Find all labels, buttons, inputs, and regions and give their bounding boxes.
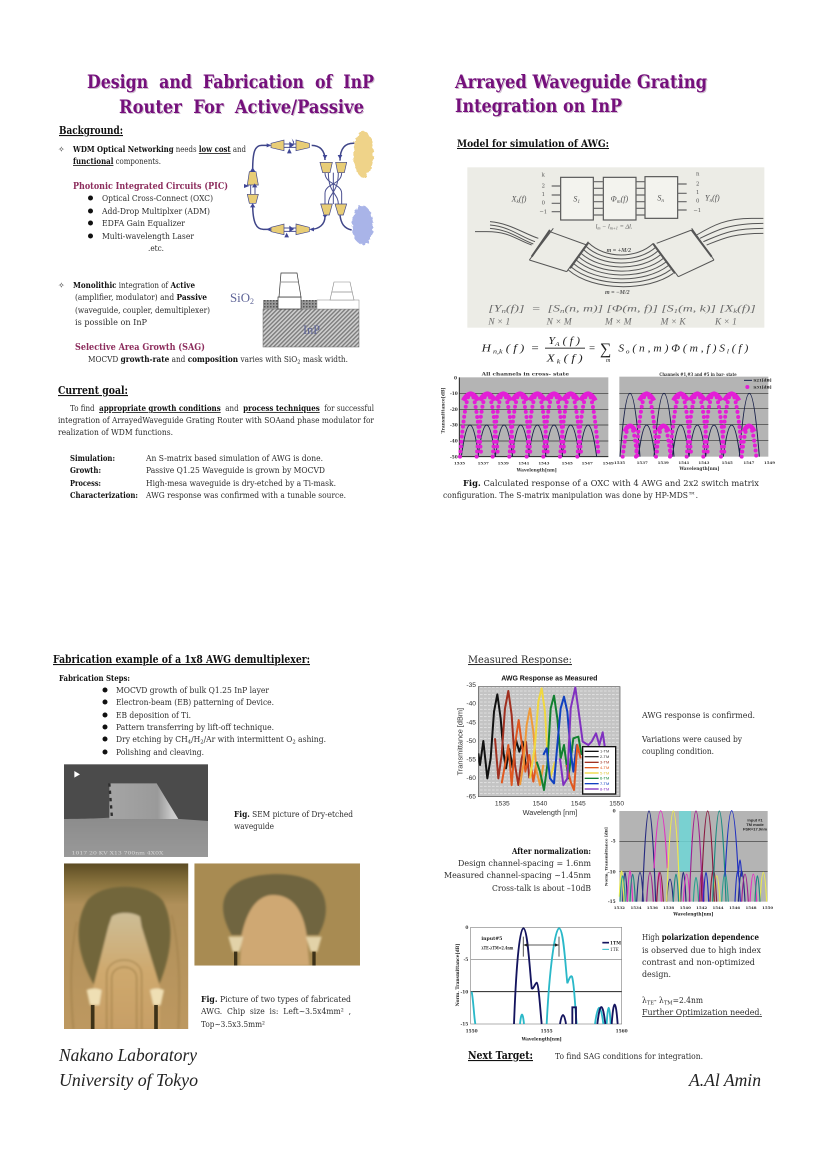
title left (87, 72, 374, 118)
cloud: blue network (352, 206, 373, 244)
diagram: AWG schematic scan: n (661, 198, 664, 204)
diagram: AWG schematic scan: Φ (611, 195, 617, 204)
text block: polarization dependence: TE (647, 1000, 654, 1006)
chart: normalized transmittance: -10 (608, 870, 616, 875)
chart: polarization dependence: -15 (461, 1023, 468, 1028)
panel: measured response (444, 654, 773, 1090)
chart: all channels in cross state: 1549 (603, 460, 614, 465)
chart: AWG response as measured: -35 (466, 682, 476, 689)
chart: normalized transmittance: 1534 (630, 905, 642, 910)
title left: Router For Active/Passive (119, 97, 364, 118)
equation: transfer function: A (554, 341, 561, 348)
chart: channels in bar state: 1549 (764, 460, 775, 465)
text block: MOCVD growth: MOCVD growth-rate and composition varies with SiO (88, 354, 303, 364)
equation: transfer function (480, 336, 749, 366)
text block: polarization dependence: TM (664, 1000, 673, 1006)
equation: transfer function: m (606, 358, 611, 364)
diagram: AWG schematic scan: 2 (542, 183, 545, 189)
text block: MOCVD growth: 2 (297, 360, 300, 366)
table: work summary (70, 453, 346, 500)
figure caption: SEM picture (234, 809, 353, 831)
chart: polarization dependence: Wavelength[nm] (521, 1037, 562, 1042)
table: work summary: An S-matrix based simulation of AWG is done. (145, 454, 323, 463)
bullet list: fabrication steps: 4 (188, 740, 192, 746)
figure caption: calculated response: Fig. Calculated response of a OXC with 4 AWG and 2x2 switch matrix (463, 478, 760, 488)
chart: channels in bar state: 1535 (614, 460, 625, 465)
label: InP: InP (303, 322, 320, 337)
chart: all channels in cross state: 1547 (582, 460, 593, 465)
chart: channels in bar state: 1545 (722, 460, 733, 465)
text block: monolithic integration: ✧ (58, 281, 65, 290)
title left: Design and Fabrication of InP (87, 72, 374, 93)
equation: transfer function: Y (548, 336, 554, 347)
bullet list: fabrication steps: Polishing and cleaving. (116, 748, 204, 757)
equation: transfer function: ( f ) = (503, 344, 539, 355)
chart: AWG response as measured: 1535 (495, 801, 510, 808)
chart: polarization dependence: 1555 (541, 1029, 553, 1034)
table: work summary: Process: (70, 478, 101, 488)
diagram: AWG schematic scan: K × 1 (714, 318, 737, 328)
diagram: AWG schematic scan: S (657, 194, 661, 203)
bullet list: fabrication steps: EB deposition of Ti. (116, 711, 191, 720)
legend: 2-TM (600, 754, 609, 759)
affiliation: University of Tokyo (59, 1070, 198, 1090)
text block: WDM networking: functional components. (73, 156, 161, 166)
heading: next target: Next Target: (468, 1049, 533, 1062)
text block: AWG response confirmed: coupling condition. (642, 747, 714, 756)
chart: AWG response as measured: 1545 (571, 801, 586, 808)
bullet list: fabrication steps (102, 686, 326, 757)
diagram: AWG schematic scan: X (512, 195, 517, 204)
diagram: AWG schematic scan: −1 (693, 208, 701, 214)
chart: normalized transmittance: FSR=17.9nm (743, 827, 767, 832)
table: work summary: Passive Q1.25 Waveguide is grown by MOCVD (146, 466, 325, 475)
chart: normalized transmittance: TM mode (746, 822, 765, 827)
bullet list: PIC types (88, 194, 213, 253)
diagram: AWG schematic scan: M × M (604, 318, 633, 328)
chart: all channels in cross state: 1537 (478, 460, 489, 465)
bullet list: fabrication steps: 2 (200, 740, 204, 746)
chart: all channels in cross state: 1541 (518, 460, 530, 465)
diagram: AWG schematic scan: l (596, 223, 597, 230)
chart: AWG response as measured: -65 (466, 794, 476, 801)
table: work summary: High-mesa waveguide is dry-etched by a Ti-mask. (146, 479, 336, 488)
equation: transfer function: ( n , m ) Φ ( m , f ) S (629, 344, 726, 355)
chart: channels in bar state: 1539 (658, 460, 669, 465)
chart: all channels in cross state: 1545 (562, 460, 573, 465)
diagram: AWG schematic scan: N × 1 (487, 318, 510, 328)
diagram: AWG schematic scan: 0 (542, 201, 546, 207)
diagram: AWG schematic scan: M × K (660, 318, 686, 328)
text block: WDM networking: WDM Optical Networking needs low cost and (72, 144, 246, 154)
bullet list: PIC types: .etc. (148, 244, 164, 253)
chart: normalized transmittance: 1540 (680, 905, 691, 910)
legend: 7-TM (600, 781, 609, 786)
chart: polarization dependence: 1550 (466, 1029, 478, 1034)
chart: AWG response as measured: 1540 (533, 801, 548, 808)
chart: AWG response as measured: -60 (466, 775, 476, 782)
chart: AWG response as measured: -55 (466, 757, 476, 764)
chart: AWG response as measured: -50 (466, 738, 476, 745)
text block: AWG response confirmed: AWG response is confirmed. (641, 711, 755, 720)
photo: fabricated AWG left (64, 863, 188, 1029)
figure caption: fabricated AWG: AWG. Chip size is: Left~3.5x4mm² , (200, 1007, 351, 1016)
poster canvas (53, 74, 775, 1090)
chart: all channels in cross state: -30 (450, 424, 458, 429)
label: SiO2: 2 (250, 297, 254, 306)
chart: normalized transmittance: 1544 (712, 905, 724, 910)
chart: AWG response as measured (456, 676, 624, 817)
diagram: AWG schematic scan: [Y (488, 305, 497, 315)
legend (583, 747, 616, 794)
equation: transfer function: ( f ) (729, 344, 749, 355)
chart: all channels in cross state: 1539 (498, 460, 509, 465)
chart: polarization dependence: 1TE (610, 948, 619, 953)
equation: transfer function: = (588, 344, 596, 355)
panel: background and motivation (58, 72, 374, 366)
text block: monolithic integration: (waveguide, coupler, demultiplexer) (75, 306, 210, 315)
heading: fabrication steps: Fabrication Steps: (59, 673, 130, 683)
text block: polarization dependence: design. (642, 970, 671, 979)
diagram: AWG schematic scan: k (733, 309, 738, 315)
diagram: AWG schematic scan: (f) (712, 194, 720, 203)
equation: transfer function: X (547, 354, 553, 365)
diagram: AWG schematic scan: m (597, 225, 601, 230)
text block: after normalization: Measured channel-spacing ~1.45nm (444, 871, 591, 880)
chart: normalized transmittance: -5 (611, 840, 616, 845)
chart: AWG response as measured: 1550 (609, 801, 624, 808)
equation: transfer function: ∑ (600, 341, 611, 358)
chart: normalized transmittance: 1536 (647, 905, 658, 910)
equation: transfer function: ( f ) (560, 336, 580, 347)
photo: SEM of dry-etched waveguide (64, 764, 208, 857)
chart: normalized transmittance: Norm. Transmittance [dB] (604, 827, 609, 886)
chart: normalized transmittance: 0 (613, 809, 616, 814)
diagram: AWG schematic scan: m (617, 199, 621, 205)
equation: transfer function: H (482, 344, 489, 355)
chart: channels in bar state: S31[dB] (753, 384, 772, 389)
table: work summary: Growth: (70, 465, 101, 475)
chart: channels in bar state: S21[dB] (753, 378, 772, 383)
text block: monolithic integration: (amplifier, modulator) and Passive (75, 292, 207, 302)
text block: polarization dependence (642, 932, 762, 1017)
chart: all channels in cross state: Transmittance[dB] (442, 387, 447, 433)
legend: 6-TM (600, 776, 609, 781)
figure caption: calculated response: configuration. The S-matrix manipulation was done by HP-MDS™. (443, 491, 698, 500)
diagram: AWG schematic scan: n (696, 171, 700, 177)
chart: polarization dependence: -5 (464, 958, 468, 963)
chart: polarization dependence: input#5 (481, 936, 502, 942)
text block: after normalization: Design channel-spacing = 1.6nm (458, 859, 591, 868)
text block: polarization dependence: contrast and non-optimized (642, 958, 755, 967)
figure caption: fabricated AWG: Fig. Picture of two types of fabricated (201, 994, 351, 1004)
panel: AWG simulation model (442, 72, 775, 500)
diagram: AWG schematic scan: n (709, 198, 712, 204)
text block: after normalization (444, 846, 591, 893)
chart: channels in bar state: Wavelength[nm] (678, 467, 719, 472)
chart: channels in bar state: 1541 (678, 460, 690, 465)
chart: channels in bar state (614, 372, 775, 472)
chart: AWG response as measured: -40 (466, 701, 476, 708)
text block: goal description: integration of ArrayedWaveguide Grating Router with SOAand phase modulator for (58, 416, 374, 425)
text block: MOCVD growth: mask width. (300, 355, 348, 364)
chart: normalized transmittance: 1538 (663, 905, 674, 910)
chart: normalized transmittance: 1542 (696, 905, 707, 910)
text block: after normalization: After normalization: (511, 846, 591, 856)
photo: SEM of dry-etched waveguide: 1017 20 KV X13 700nm 4X0X (72, 850, 164, 856)
figure caption: SEM picture: Fig. SEM picture of Dry-etched (234, 809, 353, 819)
title right (454, 72, 707, 117)
chart: channels in bar state: 1547 (743, 460, 755, 465)
diagram: AWG schematic scan: = Δl. (618, 223, 633, 230)
diagram: SAG waveguide cross-section (263, 273, 359, 347)
figure caption: calculated response (443, 478, 760, 500)
diagram: AWG schematic scan: Y (705, 194, 709, 203)
chart: normalized transmittance: 1550 (762, 905, 773, 910)
equation: transfer function: k (555, 359, 562, 366)
text block: monolithic integration (58, 280, 210, 327)
panel: fabrication example (53, 653, 360, 1090)
chart: polarization dependence: Norm. Transmittance[dB] (456, 944, 461, 1006)
bullet list: fabrication steps: Pattern transferring by lift-off technique. (116, 723, 274, 732)
bullet list: fabrication steps: Electron-beam (EB) patterning of Device. (116, 698, 274, 707)
chart: normalized transmittance: Wavelength[nm] (672, 913, 713, 918)
chart: polarization dependence: -10 (461, 990, 468, 995)
author: A.Al Amin (688, 1070, 761, 1090)
title right: Integration on InP (455, 96, 622, 117)
heading: selective area growth: Selective Area Growth (SAG) (75, 342, 205, 353)
text block: polarization dependence: λ (642, 996, 647, 1005)
diagram: AWG schematic scan: 1 (696, 190, 699, 196)
diagram: AWG schematic scan: N × M (546, 318, 573, 328)
text block: monolithic integration: Monolithic integration of Active (73, 280, 195, 290)
text block: WDM networking: ✧ (58, 145, 65, 154)
chart: AWG response as measured: AWG Response as Measured (501, 676, 597, 683)
chart: AWG response as measured: Wavelength [nm] (523, 808, 577, 817)
legend: 3-TM (600, 760, 609, 765)
diagram: AWG schematic scan (467, 167, 764, 328)
diagram: AWG schematic scan: − l (601, 223, 610, 230)
chart: channels in bar state: 1537 (637, 460, 648, 465)
diagram: AWG schematic scan: (f) (519, 195, 527, 204)
chart: polarization dependence: λTE-λTM=2.4nm (481, 945, 513, 951)
equation: transfer function: o (624, 349, 630, 356)
chart: all channels in cross state: -20 (450, 408, 458, 413)
affiliation: Nakano Laboratory (58, 1045, 197, 1065)
chart: AWG response as measured: Transmittance [dBm] (456, 708, 465, 775)
diagram: AWG schematic scan: 1 (577, 199, 580, 205)
bullet list: PIC types: EDFA Gain Equalizer (102, 219, 185, 228)
text block: goal description: realization of WDM functions. (58, 428, 173, 437)
chart: channels in bar state: Channels #1,#3 and #5 in bar- state (659, 372, 737, 378)
label: SiO2: SiO (230, 290, 250, 305)
diagram: AWG schematic scan: (f) (621, 195, 628, 204)
chart: polarization dependence (456, 926, 628, 1042)
heading: measured response: Measured Response: (468, 654, 572, 666)
panel: current goal (58, 384, 374, 500)
text block: polarization dependence: is observed due to high index (642, 946, 761, 955)
text block: goal description (58, 403, 374, 437)
text block: WDM networking (58, 144, 246, 166)
bullet list: PIC types: Add-Drop Multiplxer (ADM) (101, 207, 210, 216)
chart: AWG response as measured: -45 (466, 719, 476, 726)
chart: normalized transmittance: 1548 (745, 905, 757, 910)
title right: Arrayed Waveguide Grating (454, 72, 707, 93)
diagram: AWG schematic scan: (f)] (737, 304, 756, 315)
equation: transfer function: l (725, 349, 729, 356)
equation: transfer function: ( f ) (560, 354, 583, 365)
table: work summary: Characterization: (70, 490, 138, 500)
legend: 5-TM (600, 770, 609, 775)
cloud: yellow network (353, 131, 373, 177)
heading: model for simulation: Model for simulation of AWG: (457, 139, 609, 150)
legend: 1-TM (600, 749, 609, 754)
text block: after normalization: Cross-talk is about –10dB (492, 884, 591, 893)
bullet list: fabrication steps: Dry etching by CH (116, 735, 192, 744)
heading: photonic integrated circuits: Photonic Integrated Circuits (PIC) (73, 181, 228, 192)
photo: fabricated AWG right (194, 863, 360, 966)
chart: polarization dependence: 0 (465, 926, 468, 931)
figure caption: fabricated AWG (200, 994, 351, 1029)
chart: polarization dependence: 1560 (616, 1029, 628, 1034)
chart: polarization dependence: 1TM (610, 941, 621, 946)
bullet list: fabrication steps: /Ar with intermittent O (204, 735, 293, 744)
table: work summary: AWG response was confirmed with a tunable source. (145, 491, 346, 500)
chart: channels in bar state: 1543 (698, 460, 710, 465)
table: work summary: Simulation: (70, 453, 115, 463)
text block: polarization dependence: - λ (654, 996, 664, 1005)
diagram: AWG schematic scan: n (501, 309, 506, 315)
equation: transfer function: S (618, 344, 624, 355)
equation: transfer function: n,k (491, 349, 504, 356)
bullet list: PIC types: Optical Cross-Connect (OXC) (102, 194, 213, 203)
diagram: AWG schematic scan: m+1 (610, 225, 618, 230)
text block: polarization dependence: High polarization dependence (642, 932, 759, 942)
chart: normalized transmittance: input #1 (747, 817, 763, 822)
bullet list: fabrication steps: 2 (292, 740, 296, 746)
text block: AWG response confirmed (641, 711, 755, 756)
diagram: AWG schematic scan: m = +M/2 (607, 248, 631, 254)
diagram: AWG schematic scan: S (573, 195, 577, 204)
text block: goal description: To find appropriate growth conditions and process techniques for successful (70, 403, 374, 413)
affiliation (58, 1045, 198, 1090)
diagram: AWG schematic scan: −1 (539, 209, 547, 215)
figure caption: fabricated AWG: Top~3.5x3.5mm² (201, 1020, 265, 1029)
text block: polarization dependence: =2.4nm (673, 996, 703, 1005)
diagram: AWG schematic scan: m = −M/2 (605, 290, 630, 296)
heading: fabrication example: Fabrication example of a 1x8 AWG demultiplexer: (53, 653, 310, 666)
text block: next target: To find SAG conditions for integration. (555, 1052, 703, 1061)
text block: polarization dependence: Further Optimization needed. (642, 1008, 762, 1017)
diagram: AWG schematic scan: 0 (696, 199, 700, 205)
bullet list: fabrication steps: /H (191, 735, 200, 744)
diagram: AWG schematic scan: k (542, 173, 546, 179)
diagram: AWG schematic scan: n (560, 309, 564, 315)
text block: AWG response confirmed: Variations were caused by (641, 735, 742, 744)
chart: all channels in cross state: -50 (450, 455, 458, 460)
diagram: optical ring network (244, 131, 373, 244)
heading: current goal: Current goal: (58, 384, 128, 397)
text block: monolithic integration: is possible on InP (75, 318, 148, 327)
diagram: AWG schematic scan: 1 (542, 192, 545, 198)
diagram: AWG schematic scan: 2 (696, 181, 699, 187)
diagram: AWG schematic scan: (n, m)] [Φ(m, f)] [S (564, 304, 674, 315)
diagram: AWG schematic scan: (f)] = [S (506, 304, 560, 315)
legend: 8-TM (600, 786, 609, 791)
chart: normalized transmittance (604, 809, 773, 918)
legend: 4-TM (600, 765, 609, 770)
diagram: AWG schematic scan: 1 (674, 309, 678, 315)
diagram: AWG schematic scan: (m, k)] [X (678, 304, 734, 315)
chart: all channels in cross state: 1535 (454, 460, 465, 465)
chart: all channels in cross state: -10 (450, 392, 458, 397)
chart: all channels in cross state: 0 (454, 377, 457, 382)
chart: all channels in cross state: All channels in cross- state (480, 371, 569, 377)
diagram: AWG schematic scan: k (517, 199, 520, 205)
chart: normalized transmittance: -15 (608, 900, 616, 905)
chart: all channels in cross state (442, 371, 614, 473)
bullet list: PIC types: Multi-wavelength Laser (102, 232, 194, 241)
bullet list: fabrication steps: MOCVD growth of bulk Q1.25 InP layer (116, 686, 269, 695)
chart: normalized transmittance: 1532 (614, 905, 625, 910)
chart: all channels in cross state: -40 (450, 440, 458, 445)
bullet list: fabrication steps: ashing. (296, 735, 326, 744)
figure caption: SEM picture: waveguide (234, 822, 274, 831)
chart: all channels in cross state: Wavelength[nm] (516, 468, 557, 473)
heading: background: Background: (59, 124, 123, 137)
chart: all channels in cross state: 1543 (538, 460, 550, 465)
chart: normalized transmittance: 1546 (729, 905, 740, 910)
